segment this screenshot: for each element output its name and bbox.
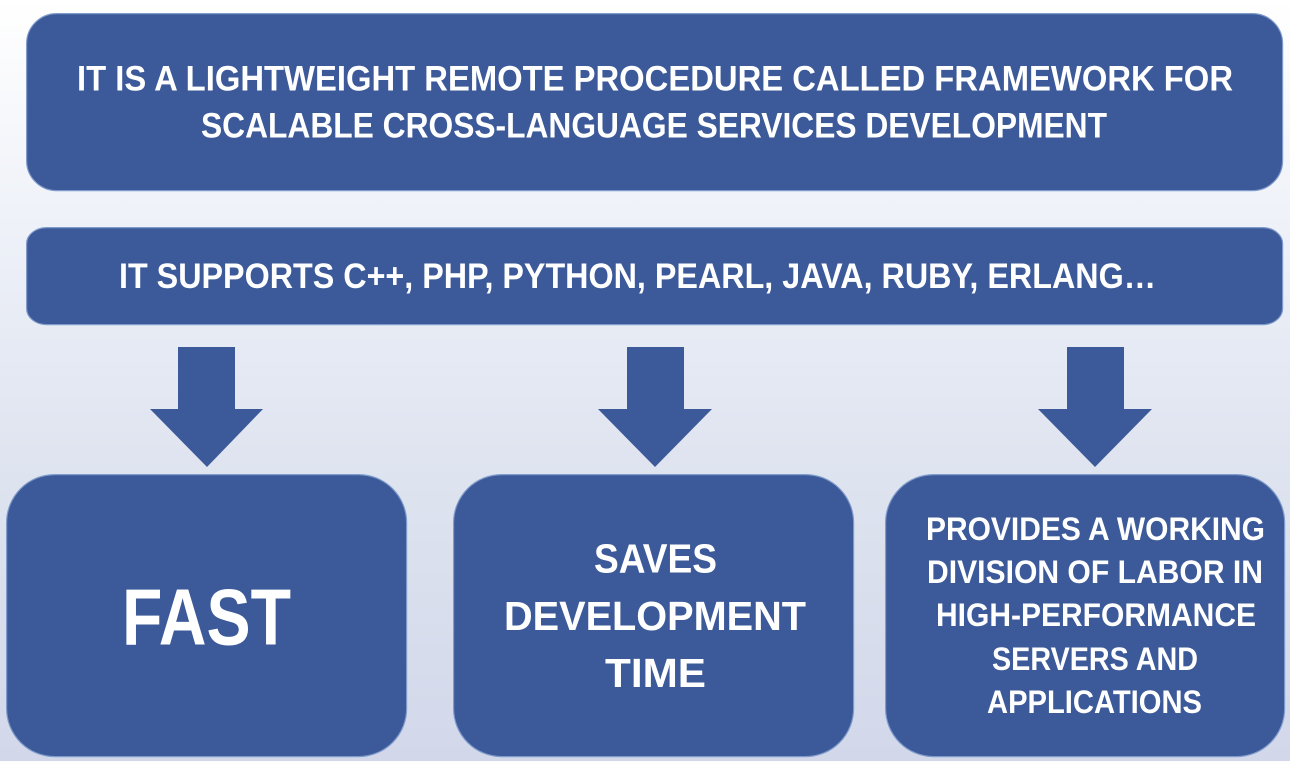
line: time: TIME <box>605 650 706 696</box>
heading line 1: IT IS A LIGHTWEIGHT REMOTE PROCEDURE CALLED FRAMEWORK FOR <box>77 60 1233 98</box>
line 5: APPLICATIONS <box>987 684 1202 720</box>
line 1: PROVIDES A WORKING <box>926 511 1265 547</box>
panel: fast <box>7 475 407 757</box>
panel: supported languages <box>27 228 1283 325</box>
languages text: IT SUPPORTS C++, PHP, PYTHON, PEARL, JAVA, RUBY, ERLANG… <box>119 257 1156 296</box>
arrow: left <box>150 347 263 467</box>
heading line 2: SCALABLE CROSS-LANGUAGE SERVICES DEVELOPMENT <box>201 106 1107 146</box>
line 3: HIGH-PERFORMANCE <box>936 597 1256 633</box>
line 4: SERVERS AND <box>992 641 1198 677</box>
line: saves: SAVES <box>594 536 717 582</box>
arrow: right <box>1038 347 1152 467</box>
line 2: DIVISION OF LABOR IN <box>927 554 1263 590</box>
panel: division of labor <box>886 475 1285 757</box>
panel: framework definition <box>27 14 1283 191</box>
arrow: middle <box>598 347 712 467</box>
panel: saves development time <box>454 475 854 757</box>
fast label: FAST <box>122 572 291 662</box>
line: development: DEVELOPMENT <box>504 593 806 639</box>
